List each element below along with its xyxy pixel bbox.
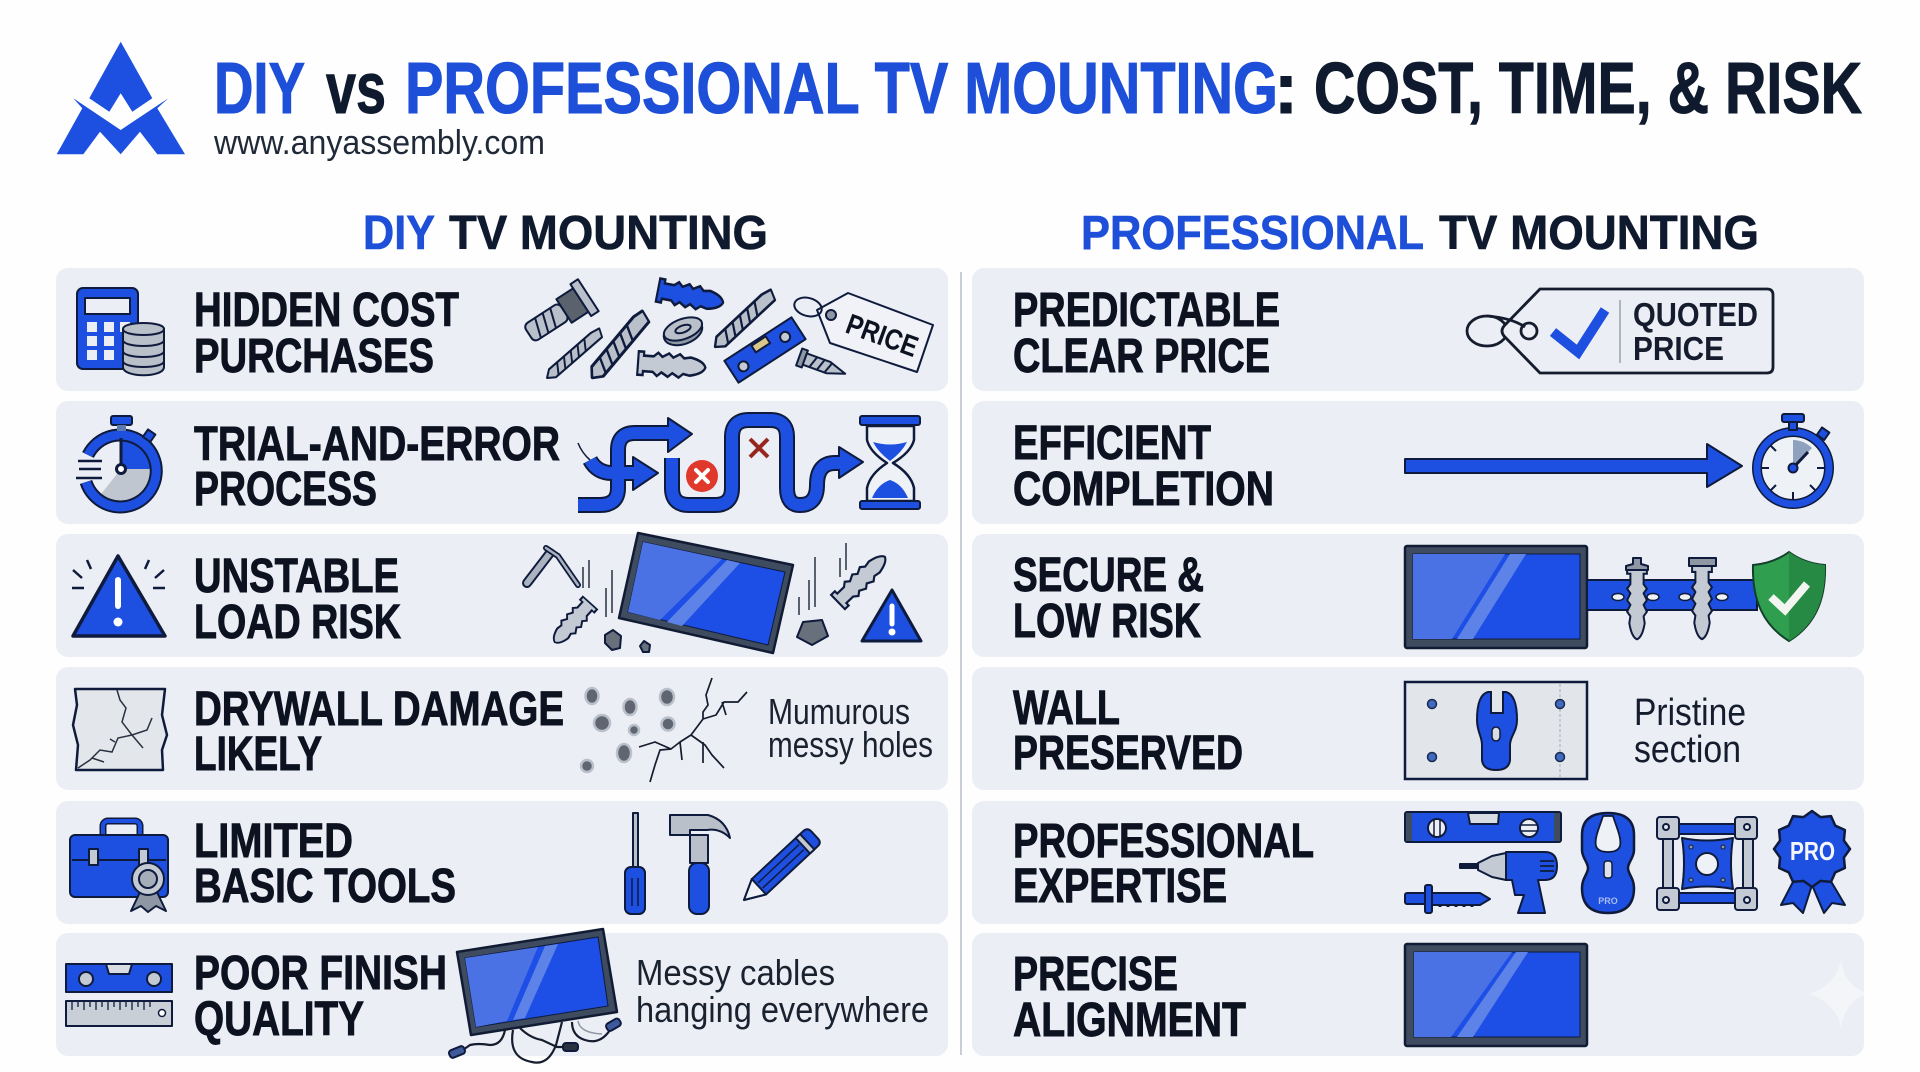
label: precise alignment [1013,948,1246,1047]
label: efficient completion: COMPLETION [1013,463,1274,516]
icon: screwdriver hammer pencil [625,813,822,914]
panel: precise alignment [972,933,1864,1056]
label: professional expertise [1013,815,1314,913]
text: pristine section [1634,692,1746,771]
label: drywall damage likely [194,683,564,781]
icon: stopwatch [76,416,156,507]
label: predictable clear price: CLEAR PRICE [1013,330,1270,383]
label: drywall damage likely: LIKELY [194,728,322,781]
icon: level and ruler [66,964,172,1026]
label: secure and low risk [1013,549,1204,648]
heading: professional column: TV MOUNTING [1439,207,1759,260]
heading: professional column: PROFESSIONAL [1081,207,1424,260]
icon: straight arrow [1405,444,1742,487]
label: poor finish quality: POOR FINISH [194,947,447,1000]
label: predictable clear price [1013,284,1280,383]
text: numerous messy holes: messy holes [768,724,933,765]
icon: stopwatch [1757,414,1829,504]
panel: wall preserved [972,667,1864,790]
label: unstable load risk: UNSTABLE [194,550,399,603]
text: messy cables: Messy cables [636,952,835,993]
website url: www.anyassembly.com [213,124,545,162]
label: limited basic tools: BASIC TOOLS [194,860,456,913]
panel: secure and low risk [972,534,1864,657]
title [214,49,1862,129]
icon: mounting frame [1657,817,1757,910]
label: limited basic tools: LIMITED [194,815,353,868]
icon: sparkle watermark [1809,960,1864,1028]
icon: PRO ribbon badge: PRO [1790,836,1835,866]
title: vs [326,49,386,129]
label: wall preserved [1013,682,1243,780]
icon: drill and anchor [1405,852,1557,913]
icon: hardware and price tag: PRICE [842,309,922,364]
label: poor finish quality [194,947,447,1046]
icon: toolbox with badge [70,821,168,912]
title: PROFESSIONAL TV MOUNTING [405,49,1278,129]
label: poor finish quality: QUALITY [194,993,364,1046]
icon: level TV [1405,944,1587,1046]
text: pristine section: Pristine [1634,692,1746,734]
icon: winding process arrows and hourglass [578,416,920,509]
panel: hidden cost purchases [56,268,948,391]
label: professional expertise: PROFESSIONAL [1013,815,1314,868]
icon: mounted TV, anchors and shield [1405,546,1825,648]
icon: level [1405,812,1561,842]
icon: cracked drywall [73,689,167,770]
label: trial-and-error process: PROCESS [194,463,377,516]
icon: warning triangle [72,556,165,636]
label: efficient completion: EFFICIENT [1013,417,1211,470]
icon: holes and wall cracks [581,678,747,782]
title: : [1274,49,1298,129]
icon: quoted price tag: QUOTED [1633,296,1758,333]
icon: falling TV and debris [527,533,921,653]
label: precise alignment: PRECISE [1013,948,1178,1001]
label: trial-and-error process: TRIAL-AND-ERROR [194,418,560,471]
label: limited basic tools [194,815,456,913]
panel: predictable clear price [972,268,1864,391]
label: hidden cost purchases [194,284,459,383]
heading: professional column [1081,207,1759,260]
label: secure and low risk: LOW RISK [1013,595,1201,648]
icon: blue bracket tool: PRO [1598,896,1618,906]
icon: PRO ribbon badge [1774,811,1850,913]
label: trial-and-error process [194,418,560,516]
label: precise alignment: ALIGNMENT [1013,994,1246,1047]
panel: unstable load risk [56,533,948,657]
label: efficient completion [1013,417,1274,516]
text: numerous messy holes: Mumurous [768,691,910,732]
icon: pristine wall with bracket [1405,682,1587,779]
heading: DIY column: TV MOUNTING [449,207,768,260]
label: hidden cost purchases: HIDDEN COST [194,284,459,337]
label: professional expertise: EXPERTISE [1013,860,1227,913]
text: numerous messy holes [768,691,933,765]
panel: trial-and-error process [56,401,948,524]
label: hidden cost purchases: PURCHASES [194,330,434,383]
logo [57,42,185,154]
title: DIY [214,49,305,129]
label: unstable load risk [194,550,401,649]
label: predictable clear price: PREDICTABLE [1013,284,1280,337]
icon: blue bracket tool [1582,813,1634,913]
icon: quoted price tag: PRICE [1633,330,1724,367]
panel: drywall damage likely [56,667,948,790]
text: messy cables [636,952,929,1030]
panel: limited basic tools [56,801,948,924]
panel: poor finish quality [56,929,948,1063]
panel: efficient completion [972,401,1864,524]
icon: hardware and price tag [518,279,933,383]
label: drywall damage likely: DRYWALL DAMAGE [194,683,564,736]
heading: DIY column: DIY [363,207,435,260]
label: wall preserved: PRESERVED [1013,727,1243,780]
label: unstable load risk: LOAD RISK [194,596,401,649]
label: secure and low risk: SECURE & [1013,549,1204,602]
icon: quoted price tag [1467,289,1773,373]
label: wall preserved: WALL [1013,682,1120,735]
text: pristine section: section [1634,729,1741,771]
icon: calculator and coins [77,288,164,375]
icon: crooked TV with messy cables [448,929,622,1063]
panel: professional expertise [972,801,1864,924]
text: messy cables: hanging everywhere [636,989,929,1030]
